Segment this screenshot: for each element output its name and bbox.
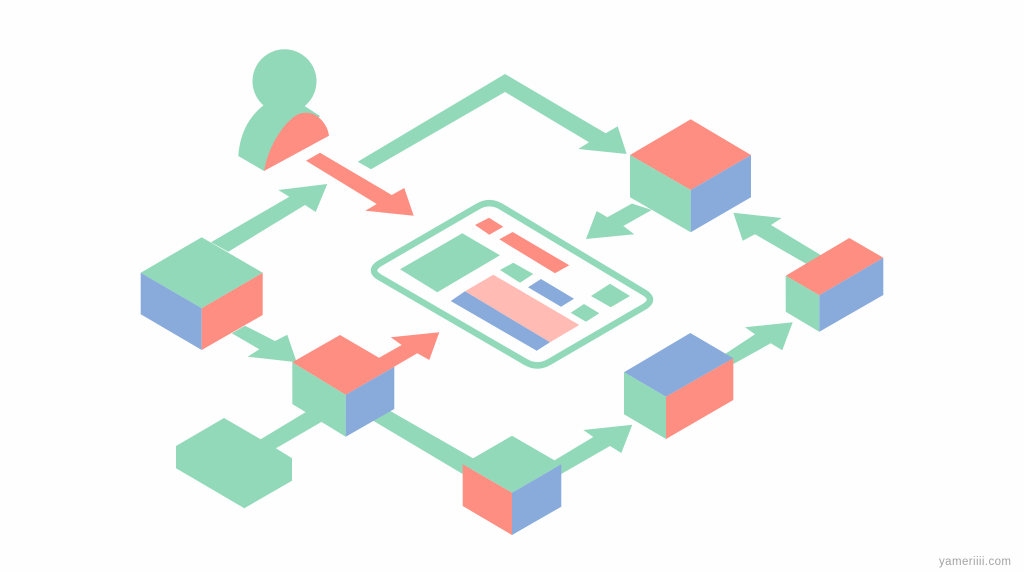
arrow: middle cube outward (red): [375, 332, 439, 368]
cube: bottom, green top: [463, 436, 561, 535]
green large block: [400, 233, 500, 292]
panel outline: [374, 203, 650, 365]
panel: central isometric dashboard: [374, 203, 650, 365]
pink content area: [465, 275, 579, 342]
blue strip: [451, 291, 550, 351]
arrow: bottom cube to blue-top box: [550, 425, 632, 477]
arrow: left cube up toward user: [211, 184, 327, 252]
blue small block: [528, 279, 574, 307]
connector: middle cube to bottom cube: [372, 408, 476, 476]
arrow: user to dashboard (red): [306, 153, 414, 216]
red small tag: [475, 218, 503, 235]
icon: user figure: [238, 49, 329, 171]
arrow: right cube to top-right cube: [733, 213, 824, 266]
arrow: top-right cube to dashboard: [586, 204, 652, 239]
cube: top right, red top: [630, 119, 751, 232]
arrow: long green elbow to top-right cube: [358, 74, 627, 169]
cube: left, green top: [141, 237, 263, 350]
connector: hexagon block with link to middle cube: [176, 406, 330, 508]
green small block: [500, 263, 533, 283]
arrow: blue-top box to right cube: [722, 322, 793, 367]
green right block: [591, 284, 630, 307]
cube: middle, red top: [292, 335, 394, 437]
arrow: left cube to middle cube: [232, 326, 297, 362]
red header bar: [499, 232, 569, 273]
green lower block: [571, 304, 599, 322]
box: right, red top: [786, 238, 883, 332]
watermark: yameriiii.com: [939, 556, 1011, 568]
box: blue top: [624, 333, 733, 439]
